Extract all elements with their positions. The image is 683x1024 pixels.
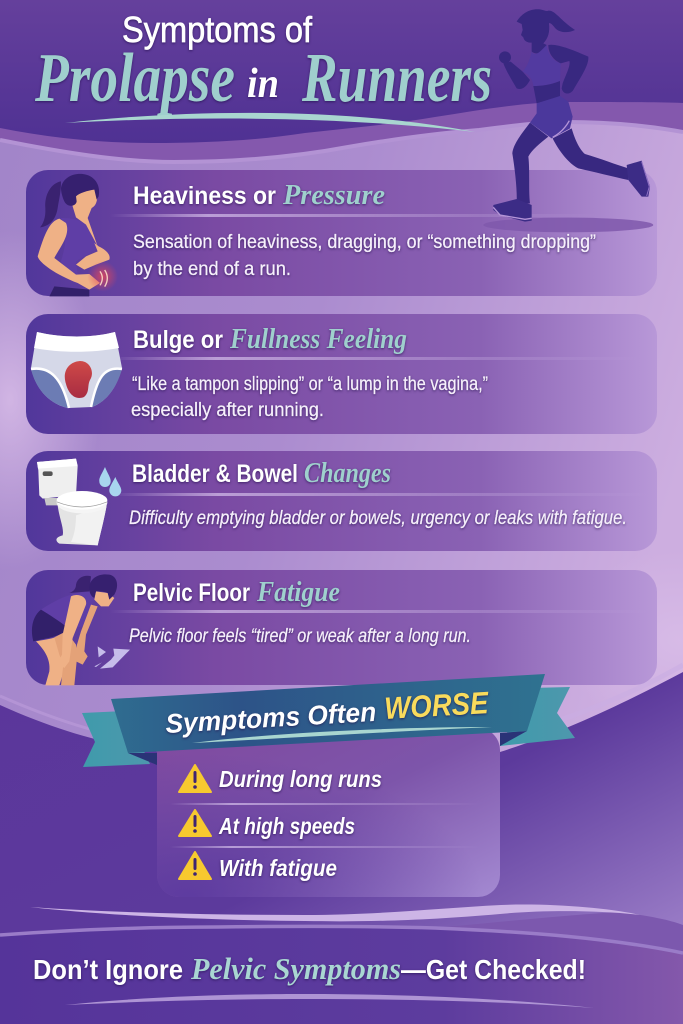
heading: Heaviness or xyxy=(133,182,276,210)
heading: Bladder & Bowel xyxy=(132,460,298,488)
heading: Changes xyxy=(304,457,391,489)
heading xyxy=(133,576,340,608)
panel: pelvic floor fatigue xyxy=(26,570,657,685)
warning text 2: At high speeds xyxy=(218,813,355,839)
icon: toilet with drops xyxy=(37,459,121,545)
cards xyxy=(26,170,657,685)
title xyxy=(34,9,492,117)
banner heading xyxy=(165,685,490,739)
warning icon 1 xyxy=(179,765,211,792)
heading: Bulge or xyxy=(133,326,223,354)
banner ribbon xyxy=(82,674,575,767)
panel: bulge or fullness xyxy=(26,314,657,434)
footer band xyxy=(0,905,683,1024)
panel: bladder and bowel xyxy=(26,451,657,551)
title: in xyxy=(247,61,279,107)
footer call to action: Don’t Ignore xyxy=(33,954,183,985)
warning icon 2 xyxy=(179,810,211,836)
title swoosh xyxy=(65,113,475,132)
footer call to action: —Get Checked! xyxy=(401,954,586,985)
icon: woman bending over xyxy=(32,574,130,685)
panel: symptoms often worse list xyxy=(82,674,575,897)
description xyxy=(131,374,488,421)
banner heading: Symptoms Often xyxy=(165,697,377,739)
heading xyxy=(133,323,407,355)
heading xyxy=(132,457,391,489)
description xyxy=(133,232,596,280)
description: especially after running. xyxy=(131,400,324,421)
runner silhouette xyxy=(483,9,653,232)
title: Prolapse xyxy=(34,40,235,117)
ribbon and symptoms list xyxy=(33,674,586,986)
title: Symptoms of xyxy=(122,9,313,50)
warning text 3: With fatigue xyxy=(219,855,337,881)
heading: Fullness Feeling xyxy=(229,323,407,355)
heading: Fatigue xyxy=(256,576,340,608)
description: Difficulty emptying bladder or bowels, urgency or leaks with fatigue. xyxy=(129,508,627,529)
banner heading: WORSE xyxy=(383,685,490,726)
heading: Pressure xyxy=(282,179,385,211)
footer call to action xyxy=(33,951,586,986)
heading xyxy=(133,179,385,211)
icon: underwear with bulge xyxy=(31,332,122,408)
description: Pelvic floor feels “tired” or weak after a long run. xyxy=(129,626,471,647)
description: by the end of a run. xyxy=(133,259,291,280)
heading: Pelvic Floor xyxy=(133,579,250,607)
description: “Like a tampon slipping” or “a lump in the vagina,” xyxy=(132,374,488,395)
panel: heaviness or pressure xyxy=(26,170,657,296)
warning text 1: During long runs xyxy=(219,766,382,792)
warning icon 3 xyxy=(179,852,211,879)
icon: woman holding abdomen xyxy=(38,174,118,296)
footer call to action: Pelvic Symptoms xyxy=(190,951,401,986)
description: Sensation of heaviness, dragging, or “something dropping” xyxy=(133,232,596,253)
title: Runners xyxy=(301,40,492,117)
